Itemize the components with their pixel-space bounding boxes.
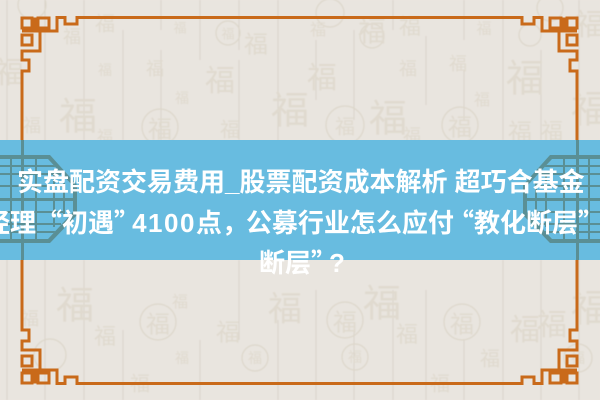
background: paper with faint characters: 福	[399, 9, 421, 41]
background: paper with faint characters: 福	[450, 304, 474, 340]
background: paper with faint characters: 福	[175, 88, 189, 108]
background: paper with faint characters: 福	[448, 108, 472, 142]
background: paper with faint characters: 福	[220, 114, 240, 142]
background: paper with faint characters: 福	[59, 86, 97, 140]
background: paper with faint characters: 福	[216, 312, 240, 348]
background: paper with faint characters: 福	[172, 288, 188, 312]
background: paper with faint characters: 福	[335, 110, 355, 140]
background: paper with faint characters: 福	[541, 114, 563, 146]
background: paper with faint characters: 福	[348, 347, 362, 367]
background: paper with faint characters: 福	[358, 10, 386, 50]
background: paper with faint characters: 福	[23, 112, 41, 138]
left lattice ornament	[0, 155, 77, 243]
background: paper with faint characters: 福	[173, 18, 187, 36]
background: paper with faint characters: 福	[399, 55, 417, 81]
background: paper with faint characters: 福	[221, 24, 235, 42]
background: paper with faint characters: 福	[369, 88, 407, 142]
background: paper with faint characters: 福	[63, 23, 81, 49]
right lattice ornament	[523, 155, 600, 243]
background: paper with faint characters: 福	[268, 282, 302, 330]
right vertical cord	[576, 140, 579, 260]
background: paper with faint characters: 福	[244, 24, 268, 60]
background: paper with faint characters: 福	[56, 274, 94, 330]
background: paper with faint characters: 福	[403, 122, 421, 148]
background: paper with faint characters: 福	[474, 86, 490, 110]
background: paper with faint characters: 福	[396, 317, 418, 349]
background: paper with faint characters: 福	[205, 56, 235, 100]
background: paper with faint characters: 福	[95, 8, 115, 36]
background: paper with faint characters: 福	[130, 368, 150, 396]
background: paper with faint characters: 福	[307, 53, 337, 97]
background: paper with faint characters: 福	[571, 348, 585, 368]
background: paper with faint characters: 福	[94, 319, 116, 351]
background: paper with faint characters: 福	[508, 112, 532, 148]
background: paper with faint characters: 福	[476, 18, 492, 38]
background: paper with faint characters: 福	[310, 16, 326, 40]
background: paper with faint characters: 福	[148, 110, 172, 144]
background: paper with faint characters: 福	[363, 272, 401, 328]
background: paper with faint characters: 福	[449, 50, 467, 76]
background: paper with faint characters: 福	[21, 305, 39, 331]
background: paper with faint characters: 福	[333, 302, 357, 338]
background: paper with faint characters: 福	[537, 300, 567, 344]
background: paper with faint characters: 福	[175, 348, 189, 368]
background: paper with faint characters: 福	[480, 342, 500, 372]
title text: 断层”?	[259, 243, 345, 280]
background: paper with faint characters: 福	[98, 60, 112, 80]
background: paper with faint characters: 福	[430, 368, 450, 396]
left vertical cord	[21, 140, 24, 260]
background: paper with faint characters: 福	[248, 348, 262, 368]
background: paper with faint characters: 福	[506, 48, 544, 102]
background: paper with faint characters: 福	[146, 304, 170, 340]
blue title band with lattice ornaments	[0, 140, 600, 260]
background: paper with faint characters: 福	[271, 80, 309, 134]
background: paper with faint characters: 福	[510, 305, 540, 349]
title text: 实盘配资交易费用_股票配资成本解析 超巧合基金	[17, 167, 585, 197]
background: paper with faint characters: 福	[97, 123, 113, 147]
background: paper with faint characters: 福	[146, 55, 164, 81]
